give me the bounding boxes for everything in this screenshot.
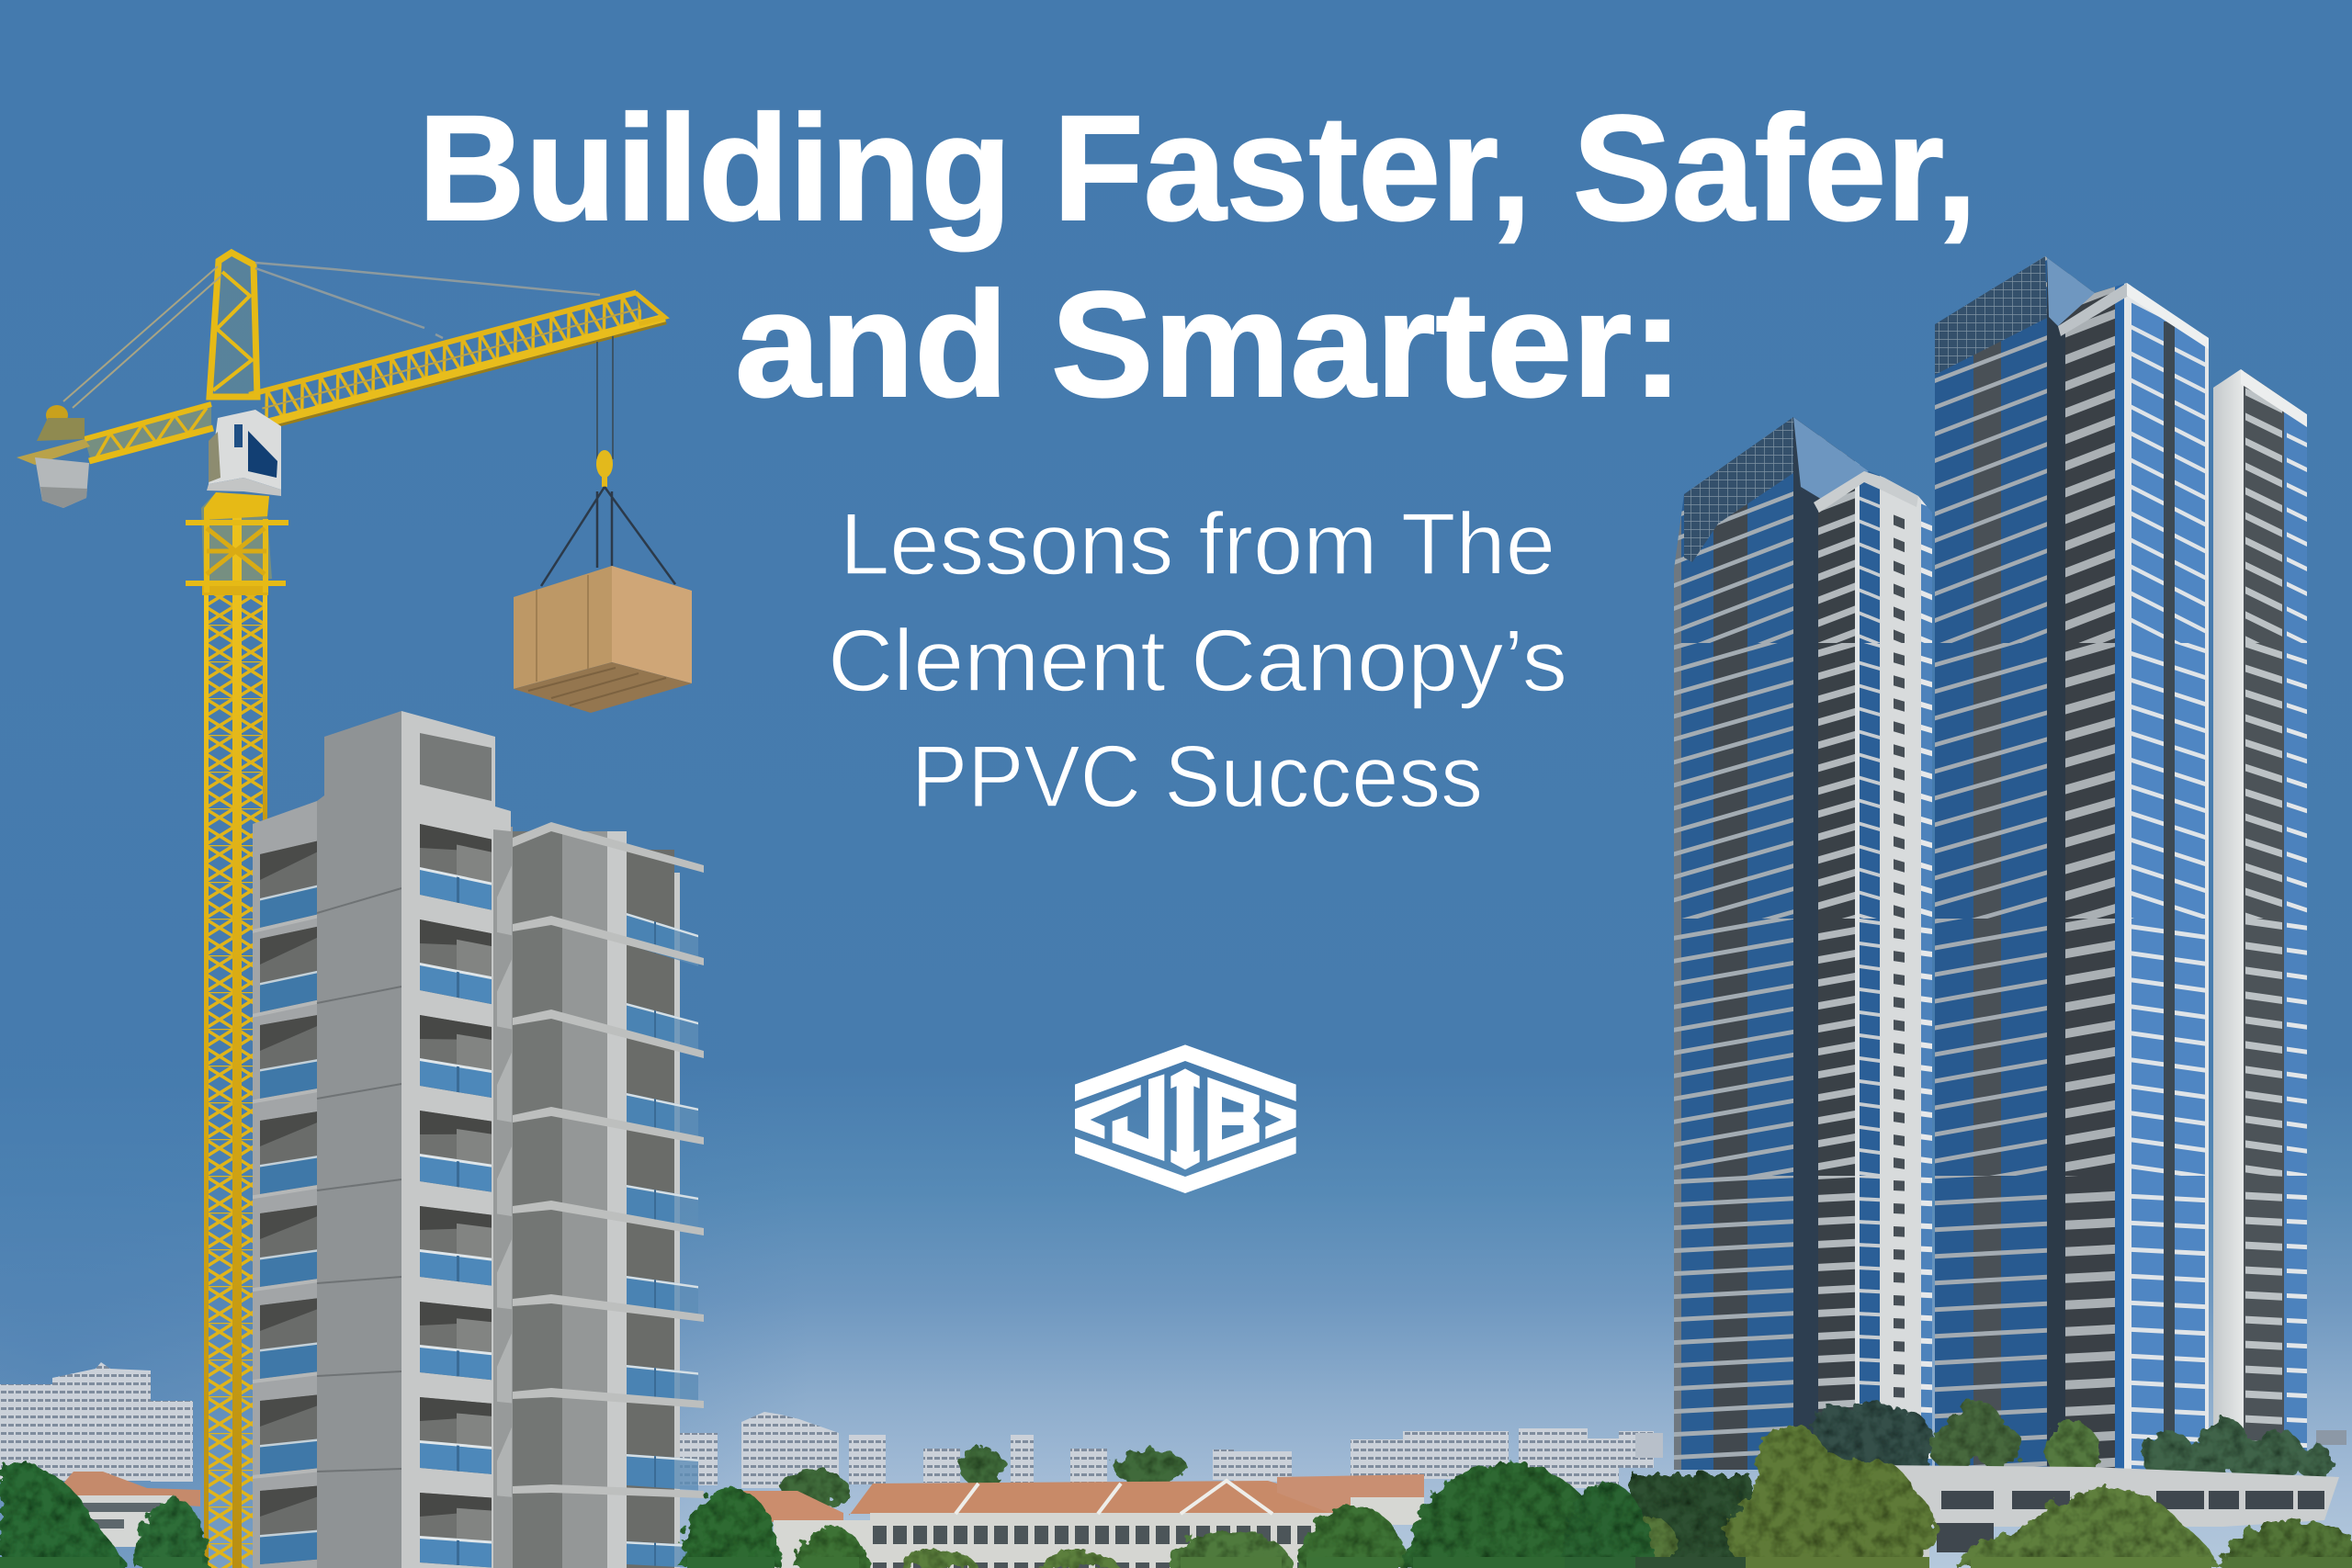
rooftop garden trees behind podium [1810, 1400, 2334, 1484]
icon: JIB logo [1075, 1044, 1296, 1193]
distant skyline: left towers [0, 1362, 193, 1482]
subtitle: Lessons from The [840, 495, 1555, 593]
crane counterweight and machinery [35, 405, 89, 508]
crane jib [248, 285, 667, 432]
right wing of building [513, 822, 704, 1568]
tower 3: rightmost white tower [2213, 273, 2307, 1474]
title: Building Faster, Safer, [418, 84, 1977, 252]
subtitle [828, 495, 1567, 826]
crane tower head [209, 253, 257, 397]
hanging PPVC module box [514, 566, 692, 713]
terraced houses with terracotta roofs [728, 1474, 1424, 1568]
tower 2: tallest blue tower [1935, 159, 2209, 1493]
tree bases along bottom edge [0, 1557, 2352, 1568]
podium block [1635, 1465, 2339, 1568]
foreground trees: left and centre [0, 1461, 1654, 1568]
hoist cables, hook and slings [541, 336, 675, 586]
core grey face of building [317, 711, 401, 1568]
left wing of building [253, 801, 317, 1568]
tower 1: left blue tower [1674, 314, 1932, 1483]
crane cab [207, 410, 281, 496]
core balcony column of building [401, 711, 513, 1568]
crane upper mast and collar [186, 492, 288, 595]
distant skyline: centre towers [680, 1412, 2346, 1488]
left house with red roof [55, 1472, 200, 1547]
crane tower mast [204, 514, 267, 1568]
unfinished concrete building [253, 711, 704, 1568]
small trees between skyline towers [782, 1448, 1187, 1506]
subtitle: Clement Canopy’s [828, 612, 1567, 710]
title: and Smarter: [735, 260, 1683, 428]
foreground trees: right [1631, 1426, 2352, 1568]
title [418, 84, 1977, 428]
crane counter-jib and stays [17, 263, 600, 465]
subtitle: PPVC Success [911, 728, 1483, 826]
